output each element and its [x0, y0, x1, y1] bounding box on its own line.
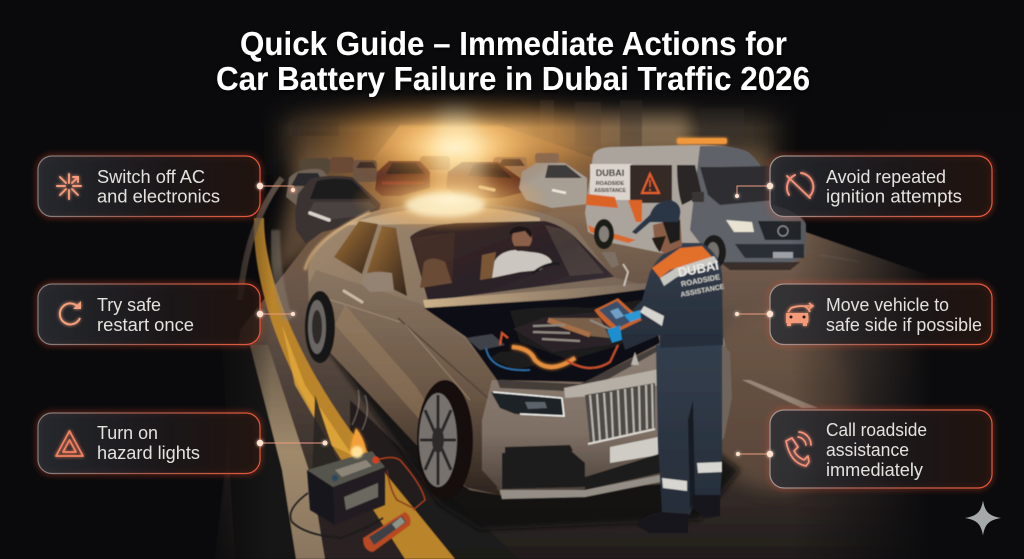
side windows [334, 221, 378, 274]
panel: switch off AC: and electronics [97, 186, 220, 206]
panel: call assistance: Call roadside [826, 420, 927, 440]
icon: restart arrow [60, 301, 81, 324]
van stripes [586, 194, 618, 208]
van windows [677, 165, 702, 205]
engine cover [513, 312, 620, 352]
rear wheel [305, 291, 335, 363]
rescue van [585, 138, 806, 270]
car: silver [519, 163, 587, 208]
car side panel [308, 270, 500, 495]
van side signage: DUBAI [596, 168, 624, 178]
van side signage [590, 164, 672, 203]
front fascia [482, 338, 731, 495]
grille [585, 383, 655, 444]
hood ornament [623, 264, 628, 286]
car: dark red center right [446, 162, 525, 198]
icon: snowflake off [57, 174, 81, 199]
panel: call assistance: immediately [826, 460, 923, 480]
car roof light [345, 207, 540, 225]
back lettering: ROADSIDE [680, 272, 721, 289]
van headlight and grille [726, 220, 754, 232]
engine bay [424, 289, 660, 382]
skyline [285, 100, 775, 175]
windshield [410, 221, 614, 301]
back lettering [675, 257, 725, 299]
car: left distant [286, 169, 328, 208]
panel: switch off AC [38, 156, 260, 216]
panel: call assistance [770, 410, 992, 488]
cap [632, 200, 680, 234]
technician boots [637, 512, 688, 533]
neck and head [653, 218, 682, 254]
van roof light [677, 138, 727, 144]
far traffic [300, 153, 559, 182]
driver [492, 226, 552, 278]
front wheel [417, 380, 473, 500]
title [216, 25, 810, 97]
car body [308, 202, 732, 495]
cables [377, 458, 425, 510]
panel: hazard lights: hazard lights [97, 443, 200, 463]
orange yoke [652, 246, 712, 278]
car shadow [325, 345, 740, 530]
icon: car with arrow [786, 303, 813, 326]
panel: avoid ignition [770, 156, 992, 216]
battery flame and smoke [352, 390, 367, 430]
cables [512, 347, 575, 367]
icon: no ignition [787, 173, 813, 198]
scene: road and traffic illustration [215, 60, 1024, 559]
title: Car Battery Failure in Dubai Traffic 2026 [216, 60, 810, 97]
lower air intakes [502, 450, 585, 489]
dark asphalt patches [312, 395, 405, 559]
multimeter [363, 512, 410, 552]
panel: safe restart: restart once [97, 315, 194, 335]
panel: hazard lights: Turn on [97, 423, 158, 443]
curved verge [240, 178, 282, 300]
wing mirrors [361, 272, 394, 292]
panel: move vehicle [770, 284, 992, 344]
hood lid raised [423, 283, 647, 308]
back lettering: DUBAI [677, 257, 720, 280]
panel: move vehicle: safe side if possible [826, 315, 982, 335]
panel: hazard lights [38, 413, 260, 474]
battery body [307, 470, 335, 525]
lane mark right [742, 380, 818, 408]
icon: sparkle watermark [965, 500, 1001, 536]
car: left dark sedan [295, 176, 381, 244]
door handle [344, 291, 362, 302]
title: Quick Guide – Immediate Actions for [240, 25, 787, 62]
van side signage: ASSISTANCE [594, 188, 627, 194]
battery on ground [290, 390, 425, 552]
warm roof glare [350, 168, 550, 232]
connectors: callout leaders [257, 183, 773, 457]
sun haze over traffic [345, 98, 565, 198]
back lettering: ASSISTANCE [680, 283, 725, 299]
grille surround [564, 368, 664, 398]
panel: move vehicle: Move vehicle to [826, 295, 949, 315]
licence plate [610, 437, 658, 463]
sun glow [273, 60, 643, 224]
icon: hazard triangle [56, 431, 83, 456]
battery compartment [466, 334, 505, 350]
technician [594, 200, 725, 533]
panel: safe restart: Try safe [97, 295, 161, 315]
technician torso and arm [618, 243, 723, 350]
panel: avoid ignition: Avoid repeated [826, 167, 946, 187]
panel: switch off AC: Switch off AC [97, 167, 205, 187]
hero car [305, 168, 740, 530]
road surface [215, 125, 1024, 559]
icon: phone signal [786, 432, 811, 466]
panel: call assistance: assistance [826, 440, 909, 460]
panel: avoid ignition: ignition attempts [826, 186, 962, 206]
lane stripe: yellow [254, 218, 455, 559]
van side signage: ROADSIDE [596, 181, 625, 187]
headlight [491, 392, 564, 416]
van wheels [594, 219, 614, 249]
technician legs [656, 340, 722, 515]
panel: safe restart [38, 284, 260, 344]
gloves and tablet [594, 298, 642, 343]
warm road light right [695, 310, 855, 490]
car: red-brown center left [375, 161, 430, 196]
kerb [250, 345, 325, 559]
right body edge [712, 340, 732, 448]
steering wheel and seats [532, 264, 560, 274]
